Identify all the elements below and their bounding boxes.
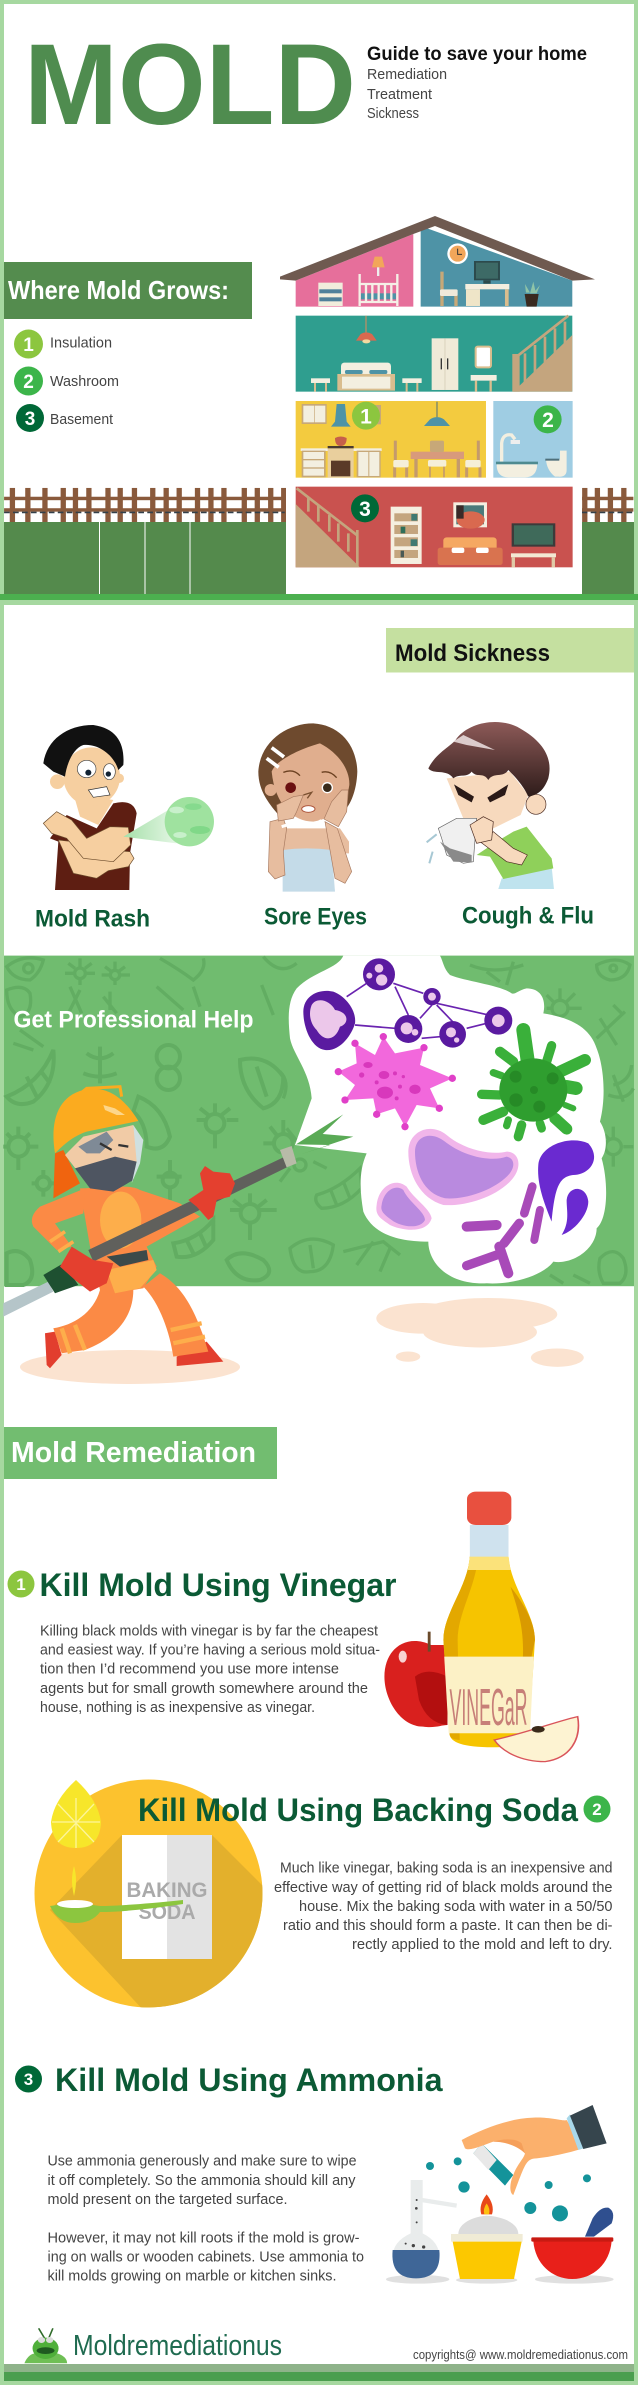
kitchen, bathroom and basement rooms [296, 401, 573, 567]
section 1 text: vinegar [40, 1622, 380, 1716]
title: MOLD [24, 21, 356, 149]
section 3 heading: ammonia: Kill Mold Using Ammonia [55, 2062, 443, 2098]
hose [3, 1282, 53, 1317]
section 3 text: ammonia: However, it may not kill roots if the mold is grow- [48, 2230, 360, 2246]
footer bars [4, 2364, 634, 2381]
spray burst [296, 1114, 353, 1154]
basement picture [453, 502, 487, 527]
flask [392, 2180, 457, 2278]
torso and arms [80, 1187, 200, 1293]
icon: boy with rash [43, 725, 214, 890]
list: mold locations: 1 [23, 335, 34, 356]
legs and boots [45, 1332, 62, 1368]
icon: chemistry set with hand [386, 2105, 614, 2284]
subtitle block: Guide to save your home [367, 43, 587, 65]
baking soda box [122, 1835, 212, 1959]
table shadows [386, 2275, 614, 2284]
basement sofa [443, 537, 497, 554]
list: mold locations: 3 [25, 409, 35, 430]
list: mold locations: Washroom [50, 374, 119, 390]
section 2 text: baking soda: house. Mix the baking soda with water in a 50/50 [299, 1898, 612, 1915]
speech cloud with germs [289, 956, 606, 1283]
section 3 heading: ammonia: 3 [24, 2070, 33, 2089]
section 2 text: baking soda [274, 1860, 612, 1953]
icon: baking soda badge [34, 1780, 270, 2012]
kitchen furniture [302, 404, 327, 424]
bathroom fixtures [502, 435, 515, 462]
section 1 text: vinegar: and easiest way. If you’re having a serious mold situa- [40, 1642, 380, 1658]
germ: purple network [303, 958, 512, 1050]
section 1 text: vinegar: agents but for small growth somewhere around the [40, 1680, 368, 1697]
subtitle block: Sickness [367, 105, 419, 122]
subtitle block: Remediation [367, 66, 447, 83]
heading: mold sickness: Mold Sickness [395, 640, 550, 667]
section 1 text: vinegar: Killing black molds with vinegar is by far the cheapest [40, 1622, 379, 1640]
attic and bedroom floors [296, 226, 572, 392]
house illustration [280, 216, 595, 576]
section 3 text: ammonia: ing on walls or wooden cabinets. Use ammonia to [48, 2248, 364, 2266]
basement bookshelf [391, 507, 422, 564]
section 1 text: vinegar: tion then I’d recommend you use more intense [40, 1660, 339, 1678]
hood and face [53, 1150, 80, 1198]
mortar bowl [531, 2208, 613, 2279]
subtitle block: Treatment [367, 86, 433, 103]
baking soda box: SODA [138, 1901, 196, 1924]
icon: vinegar bottle and apple [384, 1492, 578, 1762]
helmet [53, 1089, 138, 1153]
icon: boy with cough and flu [427, 722, 554, 889]
section 1 heading: vinegar: 1 [16, 1575, 26, 1594]
section 2 text: baking soda: effective way of getting rid of black molds around the [274, 1879, 612, 1896]
label: cough and flu: Cough & Flu [462, 902, 594, 930]
germ pattern around the cloud [280, 960, 633, 1283]
peach puddles [376, 1298, 584, 1367]
germ: green virus [482, 1030, 585, 1137]
house illustration: 3 [359, 498, 371, 521]
section 2 heading: baking soda: Kill Mold Using Backing Soda [138, 1792, 578, 1828]
heading: mold remediation: Mold Remediation [11, 1437, 256, 1469]
section 3 text: ammonia: it off completely. So the ammonia should kill any [48, 2172, 356, 2189]
lemon [51, 1780, 101, 1896]
germ: violet blobs [376, 1129, 518, 1230]
subtitle block [367, 43, 587, 122]
list: mold locations: Insulation [50, 336, 112, 352]
gloves [60, 1247, 113, 1292]
heading: mold sickness [386, 628, 634, 672]
icon: girl with sore eyes [258, 723, 357, 892]
heading: get professional help: Get Professional Help [14, 1006, 254, 1034]
worker spraying mold [3, 1087, 297, 1368]
house illustration: 1 [360, 406, 372, 428]
house illustration: 2 [542, 409, 554, 432]
section 2 text: baking soda: Much like vinegar, baking soda is an inexpensive and [280, 1860, 612, 1876]
location number markers [352, 402, 380, 430]
panel: where mold grows heading: Where Mold Grows: [8, 275, 229, 305]
section 3 text: ammonia [48, 2152, 364, 2284]
section 2 text: baking soda: rectly applied to the mold and left to dry. [352, 1936, 612, 1953]
basement stairs [296, 504, 360, 567]
worker shadow [20, 1350, 240, 1384]
roof [280, 216, 595, 281]
section 3 text: ammonia: Use ammonia generously and make sure to wipe [48, 2152, 356, 2170]
spray gun [88, 1157, 288, 1262]
apple slice [494, 1717, 578, 1762]
germ: purple commas [538, 1140, 594, 1235]
apple [384, 1641, 447, 1727]
section 1 text: vinegar: house, nothing is as inexpensive as vinegar. [40, 1699, 315, 1716]
panel: where mold grows heading [4, 262, 252, 319]
droplets [426, 2157, 591, 2221]
baking soda box: BAKING [126, 1879, 208, 1902]
heading: mold remediation [4, 1427, 277, 1479]
germ: pink star [335, 1033, 456, 1130]
section 2 heading: baking soda: 2 [592, 1800, 602, 1819]
section 1 heading: vinegar: Kill Mold Using Vinegar [40, 1567, 396, 1603]
logo wordmark: Moldremediationus [73, 2330, 282, 2362]
list: mold locations [14, 330, 119, 432]
burner [451, 2194, 523, 2279]
basement television [512, 523, 555, 547]
hand with vial [462, 2105, 607, 2195]
lawn [0, 522, 638, 600]
panel: get professional help background [3, 956, 634, 1286]
list: mold locations: 2 [23, 372, 34, 393]
section 3 text: ammonia: mold present on the targeted surface. [48, 2191, 288, 2208]
fence [4, 488, 633, 522]
label: sore eyes: Sore Eyes [264, 904, 367, 930]
section 3 text: ammonia: kill molds growing on marble or kitchen sinks. [48, 2268, 336, 2284]
germ: purple rods [467, 1187, 540, 1273]
section 2 text: baking soda: ratio and this should form a paste. It can then be di- [283, 1917, 612, 1934]
logo: green mold mascot [24, 2328, 67, 2363]
list: mold locations: Basement [50, 412, 113, 428]
spoon [50, 1900, 183, 1923]
bottle [443, 1557, 535, 1747]
label: mold rash: Mold Rash [35, 906, 150, 932]
